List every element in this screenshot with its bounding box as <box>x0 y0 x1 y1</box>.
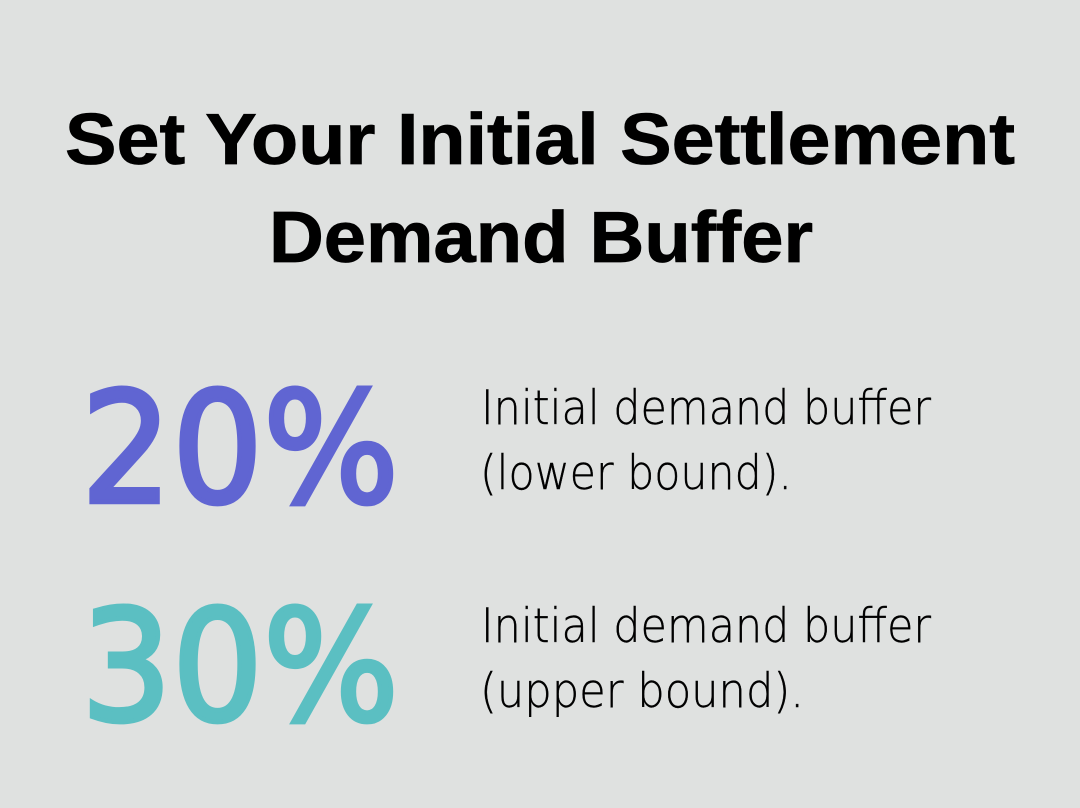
stat description: upper bound <box>480 599 932 719</box>
stat: 30% upper bound <box>81 578 932 757</box>
title: Demand Buffer <box>269 198 813 278</box>
stat description: lower bound: (lower bound). <box>480 446 792 501</box>
stat number: 30%: 30% <box>81 578 399 757</box>
stat description: upper bound: (upper bound). <box>480 664 804 719</box>
stat number: 20%: 20% <box>81 360 399 539</box>
stat description: lower bound: Initial demand buffer <box>481 381 932 436</box>
stat description: lower bound <box>480 381 932 501</box>
stat description: upper bound: Initial demand buffer <box>481 599 932 654</box>
title <box>65 100 1015 278</box>
stat: 20% lower bound <box>81 360 932 539</box>
title: Set Your Initial Settlement <box>65 100 1015 180</box>
